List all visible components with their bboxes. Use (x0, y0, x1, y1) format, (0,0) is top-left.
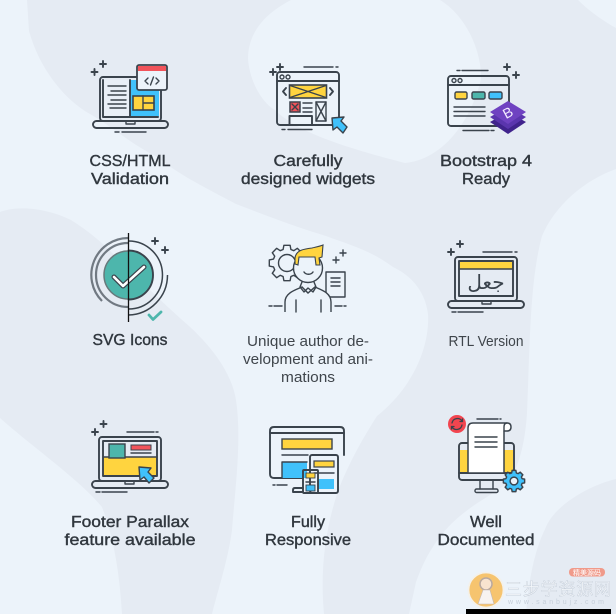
heading: Well Documented: Well (470, 514, 502, 531)
heading: Fully Responsive: Fully (291, 514, 325, 531)
heading: Carefully designed widgets: designed widgets (241, 171, 375, 188)
text: Unique author development and animations: mations (281, 369, 335, 386)
heading: Carefully designed widgets (241, 153, 375, 188)
heading: Well Documented (438, 514, 534, 549)
icon: documented monitor (448, 415, 525, 492)
watermark logo: 三步学资源网 (505, 575, 611, 600)
text: Unique author development and animations: Unique author de- (247, 333, 369, 350)
icon: author with gear (269, 245, 346, 312)
heading: Footer Parallax feature available: Footer Parallax (71, 514, 189, 531)
heading: Well Documented: Documented (438, 532, 534, 549)
watermark logo: 精美源码 (573, 568, 601, 578)
heading: Bootstrap 4 Ready (440, 153, 532, 188)
icon: Bootstrap browser window (448, 64, 526, 134)
watermark logo: www.sanbujz.com (507, 599, 604, 606)
heading: CSS/HTML Validation: CSS/HTML (90, 153, 171, 170)
heading: SVG Icons: SVG Icons (92, 332, 168, 349)
heading: Footer Parallax feature available (64, 514, 196, 549)
text: RTL Version: RTL Version (448, 333, 524, 350)
icon: RTL laptop (448, 241, 524, 312)
text: Unique author development and animations (243, 333, 373, 386)
icon: Bootstrap browser window: B (500, 103, 516, 122)
heading: CSS/HTML Validation (90, 153, 171, 188)
heading: Fully Responsive (265, 514, 351, 549)
black bar (466, 609, 611, 614)
icon: widgets browser window (270, 64, 347, 133)
heading: Carefully designed widgets: Carefully (274, 153, 342, 170)
icon: SVG circle check (91, 233, 168, 322)
heading: Bootstrap 4 Ready: Bootstrap 4 (440, 153, 532, 170)
icon: responsive devices (270, 427, 344, 493)
icon: RTL laptop: جعل (467, 270, 505, 294)
icon: footer parallax laptop (92, 421, 168, 492)
heading: CSS/HTML Validation: Validation (91, 171, 169, 188)
icon: CSS/HTML laptop (92, 61, 168, 132)
heading: Footer Parallax feature available: feature available (64, 532, 196, 549)
heading: Bootstrap 4 Ready: Ready (462, 171, 510, 188)
watermark logo (468, 568, 611, 608)
heading: Fully Responsive: Responsive (265, 532, 351, 549)
text: Unique author development and animations: velopment and ani- (243, 351, 373, 368)
